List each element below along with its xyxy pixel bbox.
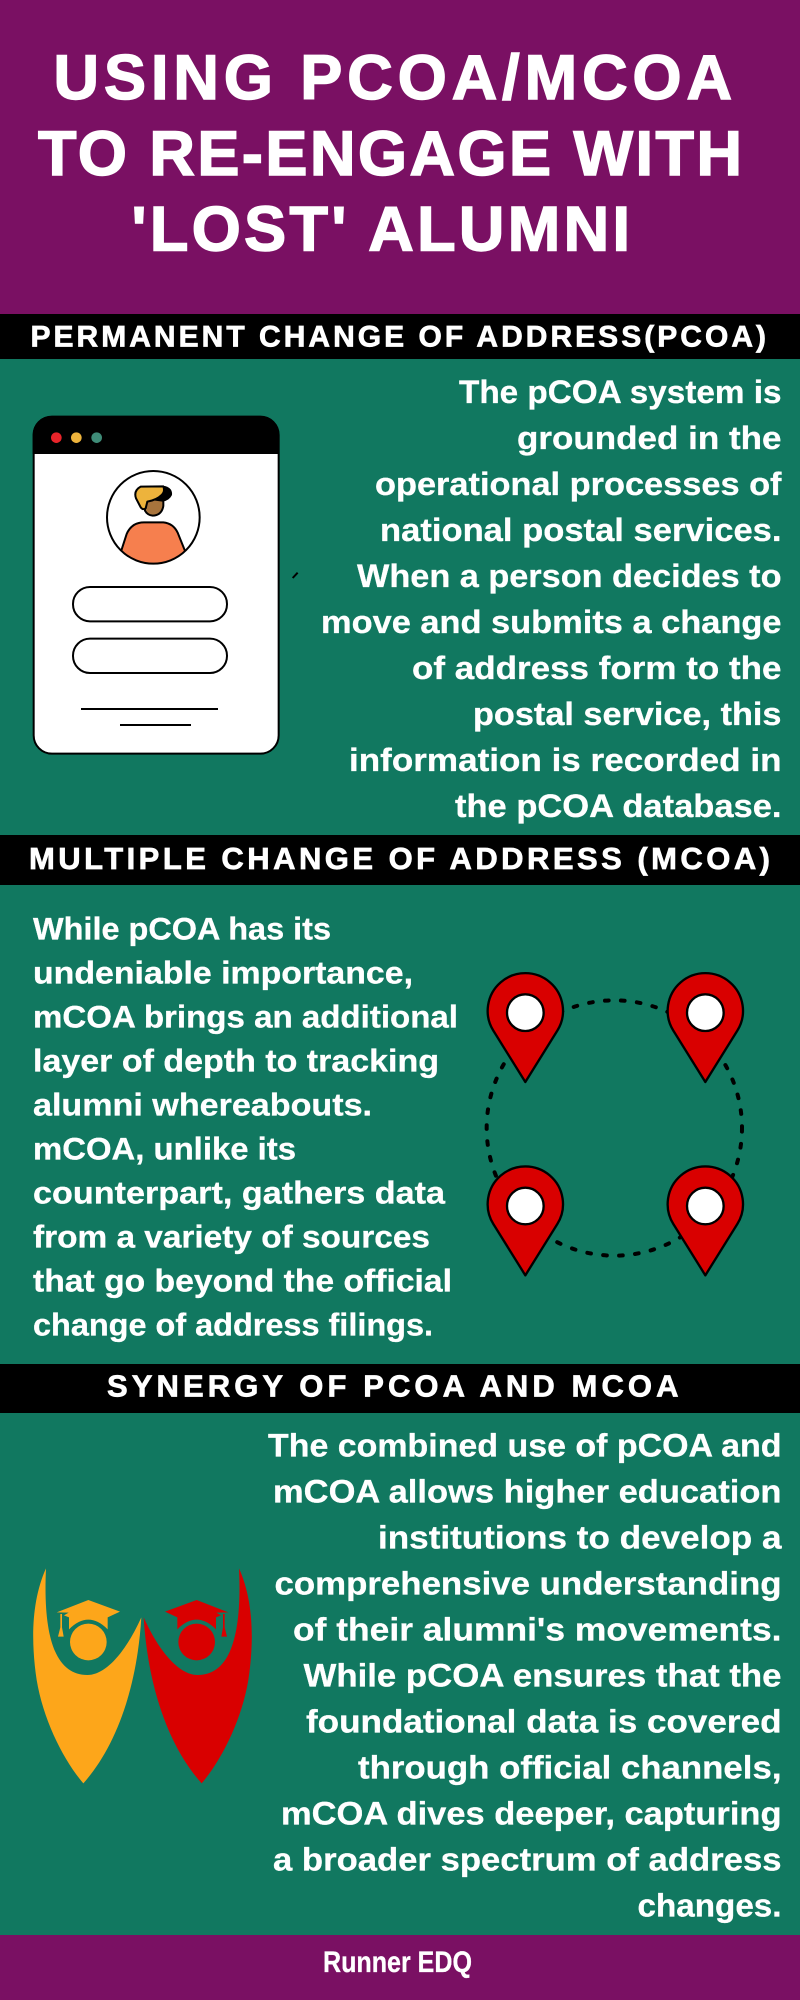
window title bar (33, 416, 279, 454)
title: 'LOST' ALUMNI (132, 194, 630, 264)
text block: mCOA description: counterpart, gathers data (33, 1174, 446, 1210)
text block: synergy description: foundational data is covered (306, 1704, 782, 1740)
title: TO RE-ENGAGE WITH (38, 119, 742, 189)
heading band: multiple change of address (0, 835, 800, 885)
text block: mCOA description: that go beyond the official (33, 1262, 452, 1298)
text block: mCOA description: from a variety of sources (33, 1218, 430, 1254)
text block: synergy description: The combined use of pCOA and (268, 1428, 782, 1464)
text block: mCOA description: undeniable importance, (33, 954, 413, 990)
graduate: red (144, 1568, 252, 1783)
text block: pCOA description: When a person decides to (357, 558, 782, 594)
panel: permanent change of address (32, 379, 782, 824)
text block: synergy description (268, 1428, 782, 1924)
form lines (81, 709, 218, 725)
text block: synergy description: mCOA dives deeper, capturing (281, 1796, 782, 1832)
window dots (51, 432, 102, 443)
graduate: orange (33, 1568, 141, 1783)
text block: mCOA description (33, 910, 458, 1342)
footer (0, 1935, 800, 2000)
text block: synergy description: changes. (638, 1888, 782, 1924)
text block: pCOA description: grounded in the (517, 420, 782, 456)
heading band: synergy (0, 1364, 800, 1413)
pin: top right (668, 973, 743, 1082)
heading band: permanent change of address (0, 314, 800, 359)
icon: profile window (33, 416, 298, 754)
text block: synergy description: through official channels, (358, 1750, 782, 1786)
title (38, 43, 742, 264)
heading band: multiple change of address: MULTIPLE CHANGE OF ADDRESS (MCOA) (29, 841, 770, 876)
pin: bottom right (668, 1166, 743, 1275)
avatar (107, 471, 200, 570)
text block: pCOA description: operational processes of (375, 466, 782, 502)
text block: pCOA description: of address form to the (412, 650, 782, 686)
text block: mCOA description: mCOA brings an additional (33, 998, 458, 1034)
footer: Runner EDQ (323, 1946, 472, 1979)
form fields (73, 587, 227, 673)
text block: synergy description: a broader spectrum of address (273, 1842, 782, 1878)
text block: pCOA description: information is recorded in (349, 742, 782, 778)
text block: mCOA description: change of address filings. (33, 1306, 433, 1342)
text block: pCOA description (321, 374, 782, 824)
header panel (0, 0, 800, 314)
heading band: synergy: SYNERGY OF PCOA AND MCOA (107, 1368, 678, 1404)
text block: pCOA description: move and submits a change (321, 604, 782, 640)
text block: synergy description: While pCOA ensures that the (304, 1658, 782, 1694)
text block: mCOA description: layer of depth to tracking (33, 1042, 439, 1078)
text block: mCOA description: While pCOA has its (33, 910, 331, 946)
text block: pCOA description: The pCOA system is (459, 374, 782, 410)
text block: mCOA description: alumni whereabouts. (33, 1086, 372, 1122)
text block: mCOA description: mCOA, unlike its (33, 1130, 296, 1166)
text block: pCOA description: national postal services. (380, 512, 782, 548)
title: USING PCOA/MCOA (54, 43, 732, 113)
text block: pCOA description: the pCOA database. (455, 788, 782, 824)
text block: synergy description: of their alumni's movements. (293, 1612, 782, 1648)
panel: synergy of pCOA and mCOA (0, 1413, 800, 1935)
pin: top left (488, 973, 563, 1082)
text block: synergy description: comprehensive understanding (274, 1566, 782, 1602)
heading band: permanent change of address: PERMANENT CHANGE OF ADDRESS(PCOA) (30, 320, 766, 354)
text block: synergy description: institutions to develop a (378, 1520, 782, 1556)
small tick mark (293, 573, 298, 578)
icon: location pins on dashed circle (487, 973, 743, 1275)
icon: two graduates (33, 1568, 252, 1783)
text block: pCOA description: postal service, this (473, 696, 782, 732)
panel: multiple change of address (0, 885, 800, 1364)
text block: synergy description: mCOA allows higher education (273, 1474, 782, 1510)
pin: bottom left (488, 1166, 563, 1275)
